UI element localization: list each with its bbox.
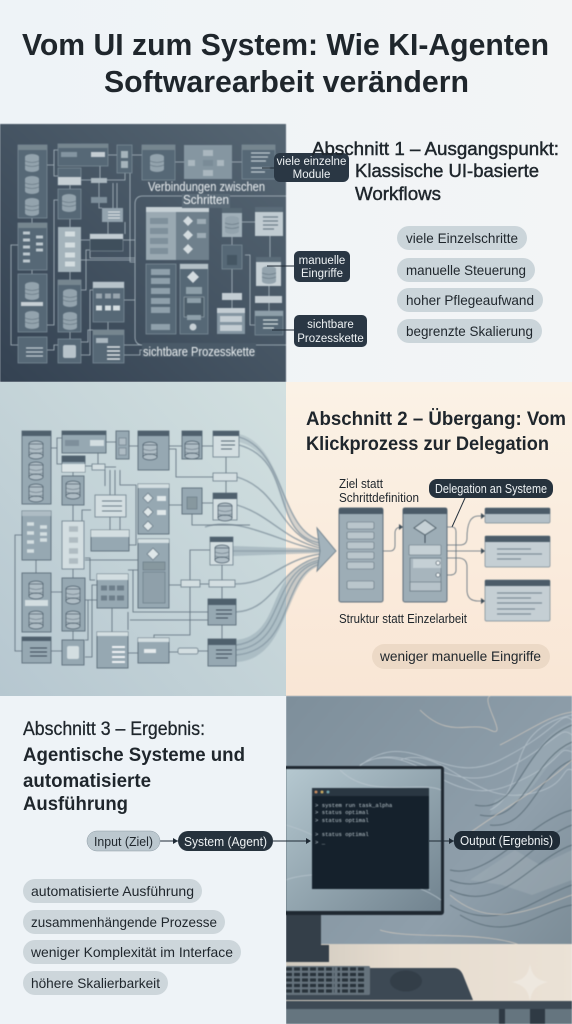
heading: Abschnitt 2 — [306, 407, 566, 455]
heading: Abschnitt 1 — [312, 138, 559, 204]
connector lines section 2 — [15, 438, 250, 657]
heading: Abschnitt 3 — [23, 718, 245, 815]
diagram: delegation windows — [339, 508, 550, 621]
panel: section 3 text background — [0, 696, 286, 1024]
callout: Delegation an Systeme — [429, 479, 553, 527]
database icons — [29, 441, 232, 629]
pill: Output (Ergebnis): Output (Ergebnis) — [460, 833, 553, 848]
window: output 1 — [485, 508, 550, 523]
label: sichtbare Prozesskette: sichtbare Prozesskette — [143, 344, 255, 359]
terminal window: > status optimal — [315, 809, 369, 816]
panel: section 3 photo — [280, 696, 572, 1024]
label: Ziel statt Schrittdefinition: Schrittdefinition — [339, 491, 419, 505]
mouse — [390, 970, 422, 992]
label: Verbindungen zwischen Schritten: Verbindungen zwischen — [148, 179, 265, 194]
pill: System (Agent): System (Agent) — [184, 834, 267, 849]
callout: sichtbare Prozesskette — [272, 315, 367, 347]
panel: section 2 background — [0, 382, 572, 696]
pill list: section 1: hoher Pflegeaufwand — [406, 292, 534, 308]
pill list: section 3: zusammenhängende Prozesse — [31, 914, 217, 930]
pill list: section 3: höhere Skalierbarkeit — [31, 975, 160, 991]
pill list: section 1: manuelle Steuerung — [406, 262, 526, 278]
window: structured process — [403, 508, 447, 602]
pill: System (Agent) — [178, 831, 273, 851]
pill list: section 3: automatisierte Ausführung — [31, 883, 194, 899]
windows — [18, 144, 283, 363]
callout: sichtbare Prozesskette: sichtbare — [307, 319, 354, 331]
panel: section 2 diagram — [15, 431, 336, 668]
terminal window: > _ — [315, 839, 326, 846]
heading: Abschnitt 1: Klassische UI-basierte — [355, 160, 539, 181]
callout: manuelle Eingriffe — [267, 251, 350, 282]
heading: Abschnitt 3: Ausführung — [23, 793, 128, 815]
label: Ziel statt Schrittdefinition — [339, 477, 419, 505]
window: output 2 — [485, 536, 550, 567]
callout: viele einzelne Module: viele einzelne — [277, 156, 346, 168]
pill list: section 3 — [23, 879, 241, 995]
heading: Abschnitt 3: automatisierte — [23, 770, 151, 792]
label: Verbindungen zwischen Schritten: Schritten — [183, 192, 229, 207]
window: output 3 — [485, 580, 550, 621]
title: Softwarearbeit verändern — [104, 64, 469, 99]
callout: Delegation an Systeme: Delegation an Systeme — [435, 482, 547, 496]
callout: manuelle Eingriffe: Eingriffe — [301, 268, 343, 280]
pill: weniger manuelle Eingriffe: weniger manuelle Eingriffe — [379, 648, 541, 664]
pill: weniger manuelle Eingriffe — [372, 644, 550, 669]
heading: Abschnitt 3: Abschnitt 3 – Ergebnis: — [23, 718, 205, 740]
desk — [286, 944, 572, 1001]
database icons — [25, 154, 276, 330]
window: step list — [339, 508, 383, 602]
terminal window — [312, 788, 429, 889]
heading: Abschnitt 3: Agentische Systeme und — [23, 744, 245, 766]
label: Ziel statt Schrittdefinition: Ziel statt — [339, 477, 383, 491]
heading: Abschnitt 1: Workflows — [355, 183, 441, 204]
background waves — [355, 696, 572, 945]
connector lines section 1 — [11, 150, 270, 355]
pill list: section 1 — [397, 226, 543, 343]
title: Vom UI zum System: Wie KI-Agenten — [22, 27, 549, 62]
title — [22, 27, 549, 99]
heading: Abschnitt 1: Abschnitt 1 – Ausgangspunkt: — [312, 138, 559, 159]
label: Struktur statt Einzelarbeit: Struktur statt Einzelarbeit — [339, 612, 467, 626]
pill: Input (Ziel): Input (Ziel) — [94, 834, 153, 849]
arrows — [160, 840, 454, 842]
panel: section 1 diagram — [0, 124, 286, 382]
callout: viele einzelne Module: Module — [293, 169, 330, 181]
label: Verbindungen zwischen Schritten — [148, 179, 265, 208]
icon: sparkle — [512, 964, 548, 1001]
heading: Abschnitt 2: Klickprozess zur Delegation — [306, 433, 549, 455]
pill list: section 3: weniger Komplexität im Interface — [30, 944, 233, 960]
large arrow — [317, 528, 336, 571]
terminal window: > system run task_alpha — [315, 802, 393, 809]
flow: input to output — [87, 831, 560, 851]
pill list: section 1: begrenzte Skalierung — [406, 323, 533, 339]
pill list: section 1: viele Einzelschritte — [406, 230, 518, 246]
connectors — [383, 516, 485, 601]
flow streams into arrow — [205, 434, 320, 662]
monitor stand — [286, 915, 329, 962]
callout: manuelle Eingriffe: manuelle — [299, 255, 345, 267]
pill: Input (Ziel) — [87, 831, 160, 851]
heading: Abschnitt 2: Abschnitt 2 – Übergang: Vom — [306, 407, 566, 430]
terminal window: > status optimal — [315, 817, 369, 824]
callout: viele einzelne Module — [262, 153, 349, 182]
monitor — [280, 766, 444, 915]
terminal window: > status optimal — [315, 831, 369, 838]
callout: sichtbare Prozesskette: Prozesskette — [297, 333, 364, 345]
keyboard and mouse pad — [286, 966, 473, 1000]
